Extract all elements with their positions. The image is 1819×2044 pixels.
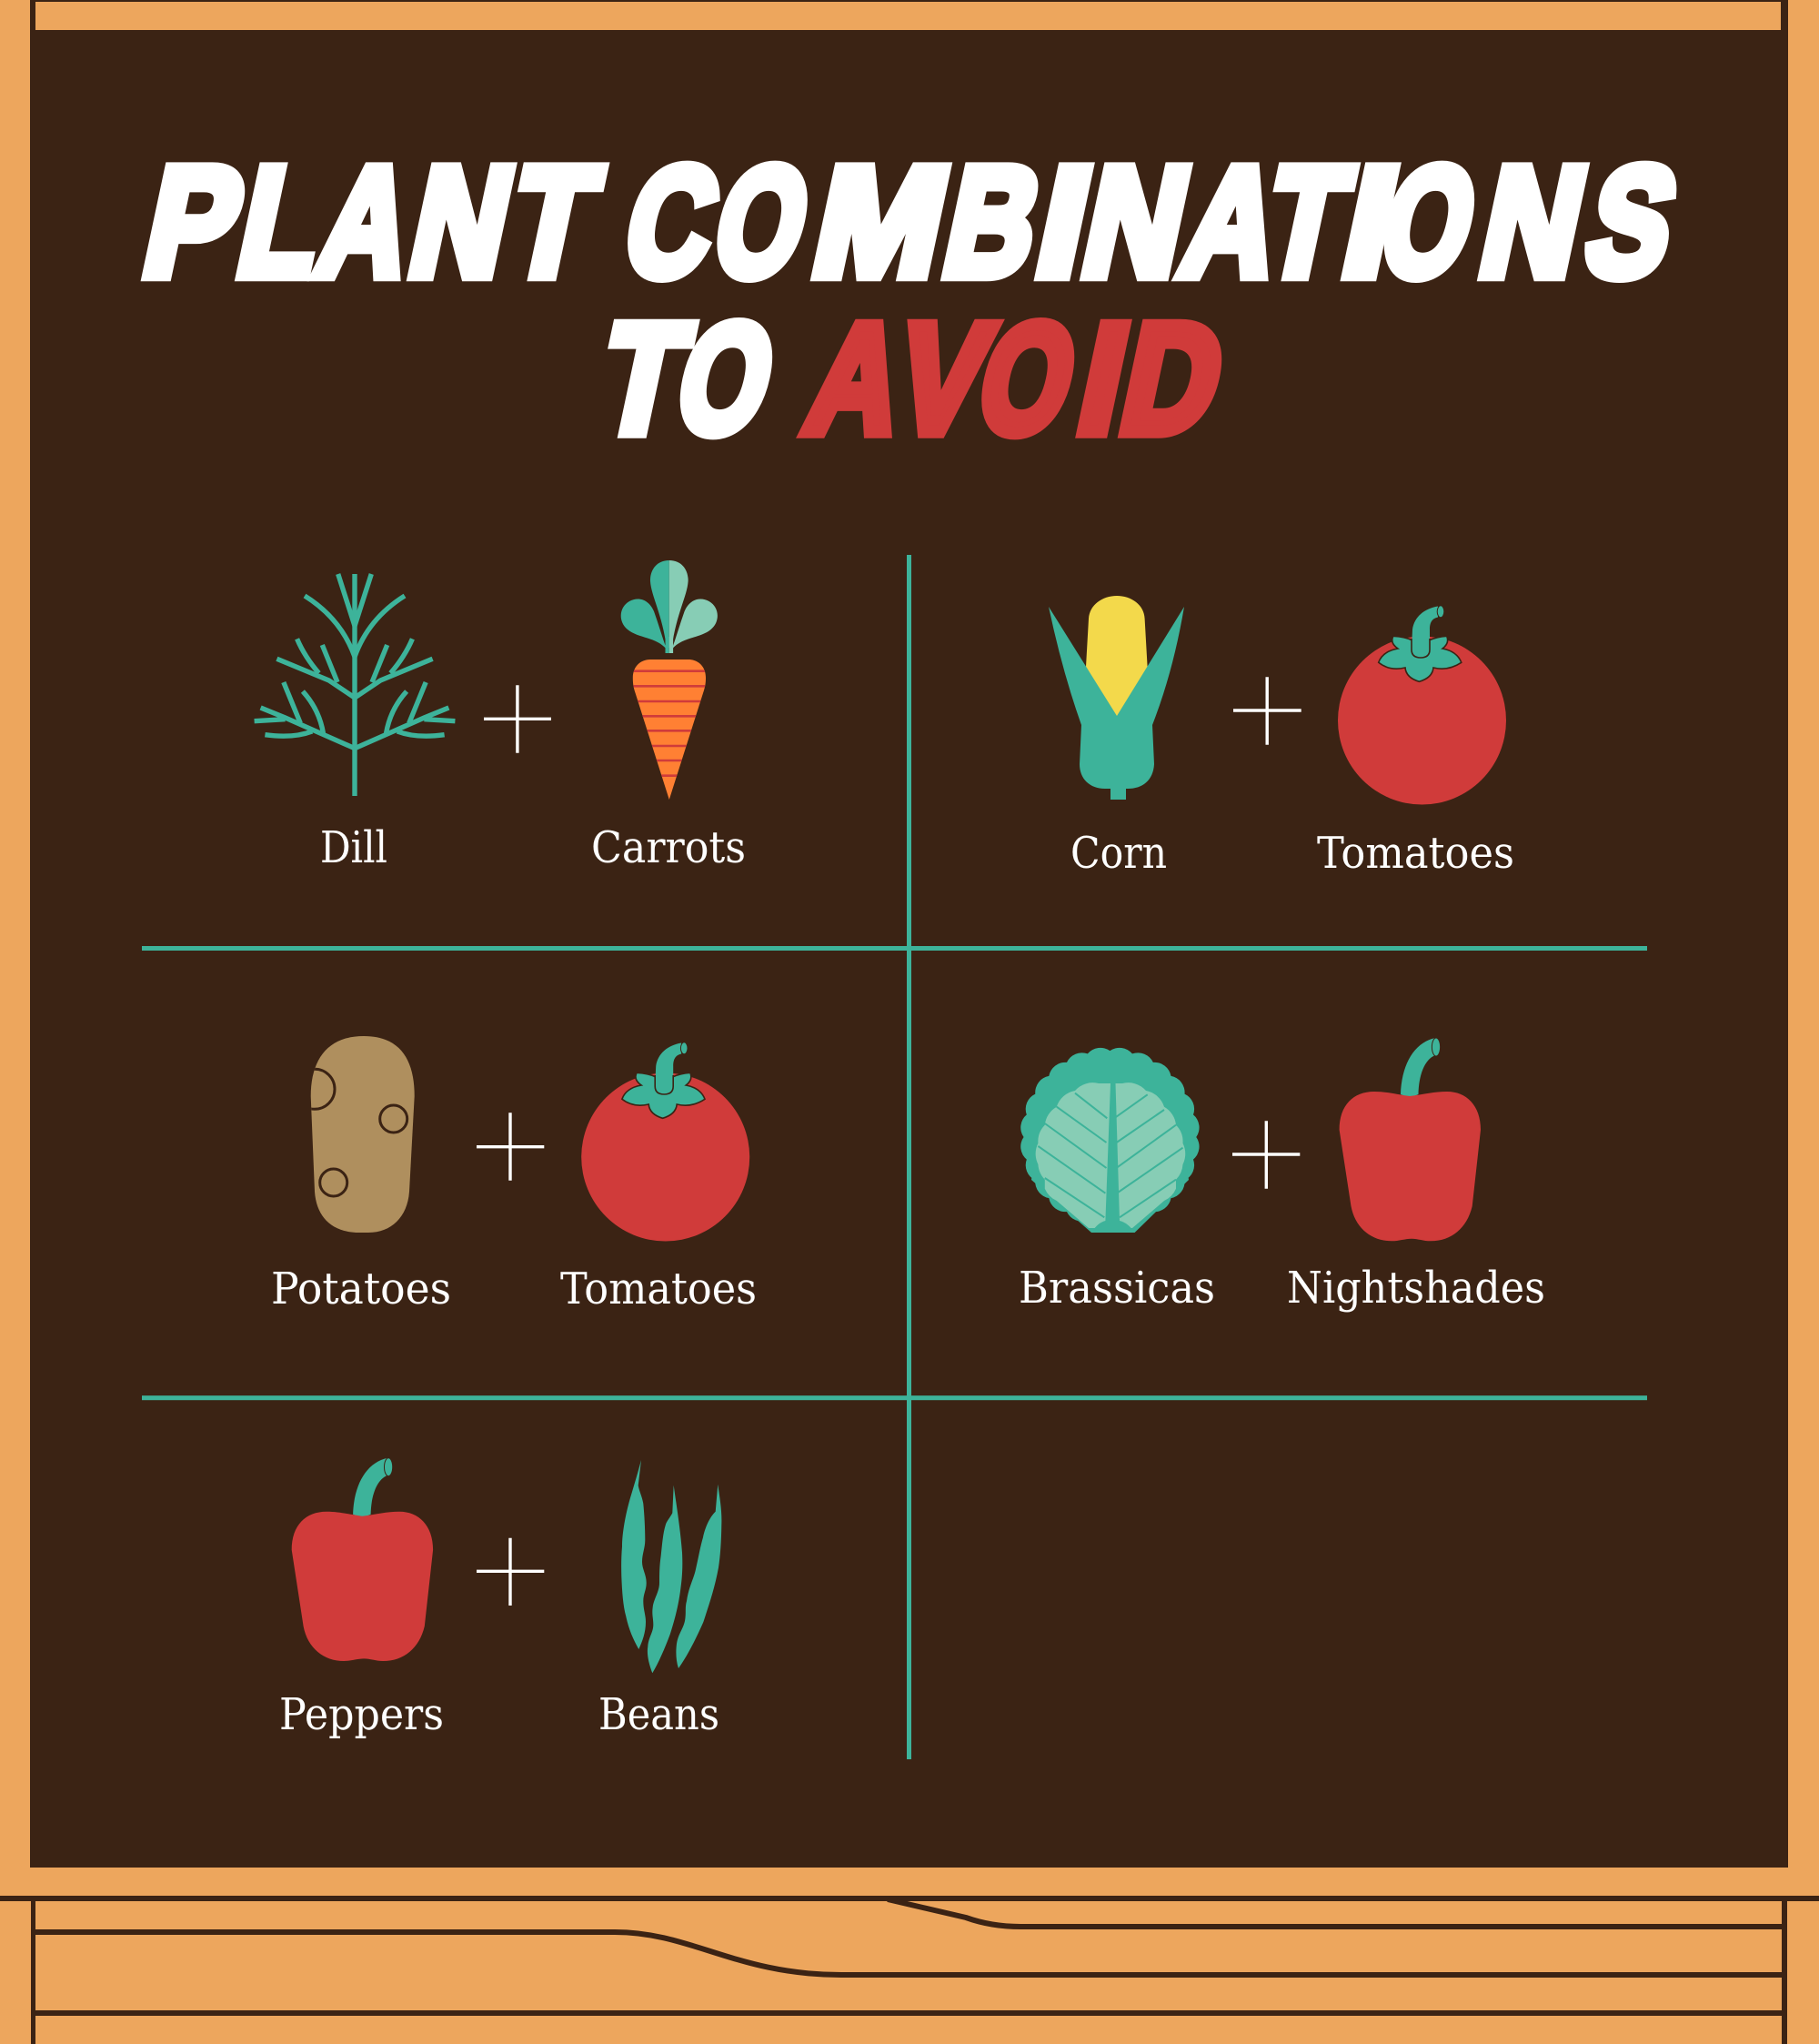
icon: plus: [484, 685, 551, 753]
icon: plus: [1233, 677, 1301, 745]
title line 1: C: [612, 136, 732, 308]
title line 1: N: [1468, 136, 1599, 308]
title line 1: A: [306, 136, 427, 308]
panel: brassicas and nightshades: [1019, 1038, 1545, 1314]
title line 1: I: [1331, 136, 1412, 308]
title line 2: avoid: O: [966, 292, 1090, 465]
label: potatoes: Potatoes: [271, 1264, 451, 1314]
title: [132, 136, 1691, 465]
title line 1: T: [497, 136, 611, 308]
label: tomatoes: Tomatoes: [560, 1264, 757, 1314]
title line 2: to: T: [587, 292, 702, 465]
icon: beans: [621, 1460, 721, 1673]
icon: dill: [255, 574, 455, 796]
title line 1: B: [931, 136, 1055, 308]
title line 2: avoid: I: [1066, 292, 1141, 465]
icon: carrot: [621, 560, 718, 800]
label: dill: Dill: [320, 822, 387, 873]
title line 1: N: [1070, 136, 1202, 308]
title line 1: M: [800, 136, 962, 308]
icon: tomato: [1338, 606, 1506, 804]
label: tomatoes: Tomatoes: [1317, 828, 1514, 879]
icon: plus: [1232, 1121, 1300, 1189]
title line 1: A: [1170, 136, 1295, 308]
label: peppers: Peppers: [279, 1689, 444, 1740]
label: beans: Beans: [598, 1689, 719, 1740]
title line 2: to: O: [664, 292, 789, 465]
title line 1: O: [701, 136, 823, 308]
title line 1: I: [1024, 136, 1105, 308]
panel: peppers and beans: [279, 1458, 721, 1740]
icon: plus: [477, 1538, 544, 1606]
title line 2: avoid: V: [883, 292, 1004, 465]
icon: plus: [477, 1113, 544, 1181]
title line 1: T: [1251, 136, 1363, 308]
panel: dill and carrots: [255, 560, 746, 873]
label: corn: Corn: [1070, 828, 1167, 879]
panel: potatoes and tomatoes: [271, 1036, 757, 1314]
grid lines: [142, 555, 1647, 1759]
label: nightshades: Nightshades: [1287, 1263, 1545, 1314]
icon: cabbage: [1020, 1048, 1200, 1233]
label: carrots: Carrots: [591, 822, 746, 873]
label: brassicas: Brassicas: [1019, 1263, 1215, 1314]
title line 2: avoid: A: [794, 292, 920, 465]
title line 1: S: [1573, 136, 1691, 308]
icon: bell pepper: [1340, 1038, 1481, 1241]
title line 1: L: [226, 136, 338, 308]
icon: tomato: [581, 1042, 749, 1241]
icon: corn: [1049, 596, 1184, 800]
title line 1: O: [1368, 136, 1490, 308]
title line 1: P: [132, 136, 256, 308]
title line 2: avoid: D: [1109, 292, 1238, 465]
panel: corn and tomatoes: [1049, 596, 1514, 879]
title line 1: N: [397, 136, 527, 308]
icon: potato: [311, 1036, 415, 1233]
icon: bell pepper: [292, 1458, 433, 1661]
